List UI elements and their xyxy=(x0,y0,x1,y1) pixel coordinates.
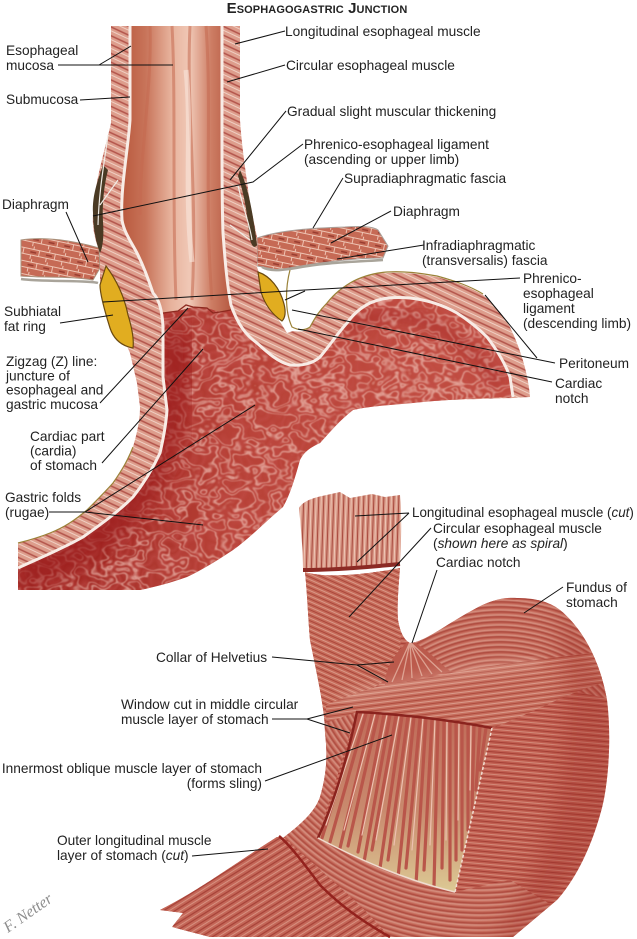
title: Esophagogastric Junction xyxy=(227,0,407,17)
diaphragm right xyxy=(257,226,388,270)
label: infradiaphragmatic fascia: Infradiaphragmatic xyxy=(422,238,535,253)
label: window cut: Window cut in middle circular xyxy=(121,697,298,712)
right body fibres xyxy=(150,560,620,939)
label: zigzag line: juncture of xyxy=(5,368,70,383)
label: window cut: muscle layer of stomach xyxy=(121,712,269,727)
mucosa base xyxy=(15,295,520,595)
window lower edge xyxy=(318,838,455,892)
lower arcs xyxy=(270,712,560,939)
stomach mucosa xyxy=(15,295,520,595)
label: circular esophageal muscle: Circular esophageal muscle xyxy=(286,58,455,73)
window top edge xyxy=(318,712,492,838)
window in circular layer xyxy=(318,712,492,892)
label: phrenico-esophageal ligament descending: ligament xyxy=(523,301,575,316)
collar highlight xyxy=(340,660,540,700)
esophagus pale streak xyxy=(186,70,192,262)
label: infradiaphragmatic fascia: (transversalis) fascia xyxy=(422,253,548,268)
label: phrenico-esophageal ligament upper: Phrenico-esophageal ligament xyxy=(304,137,489,152)
label: zigzag line: esophageal and xyxy=(6,383,103,398)
fundus arcs xyxy=(410,600,615,700)
label: zigzag line: Zigzag (Z) line: xyxy=(6,354,97,369)
wall silhouette xyxy=(18,26,530,590)
outer longitudinal cut edge xyxy=(279,836,390,937)
label: gastric folds: (rugae) xyxy=(5,505,49,520)
tube fibres xyxy=(305,568,401,722)
inner white line xyxy=(18,26,167,568)
window cut edge xyxy=(455,728,492,892)
label: outer longitudinal: layer of stomach ( xyxy=(57,848,166,863)
esophagus folds xyxy=(140,26,212,300)
label: forms sling: (forms sling) xyxy=(187,776,262,791)
label: esophageal mucosa: Esophageal xyxy=(6,43,78,58)
label: innermost oblique: Innermost oblique muscle layer of stomach xyxy=(2,761,262,776)
esophagus lumen xyxy=(122,26,231,313)
illustration: stomach muscle layers xyxy=(150,492,620,939)
label: supradiaphragmatic fascia: Supradiaphragmatic fascia xyxy=(344,171,506,186)
fan strokes xyxy=(392,642,442,682)
label: diaphragm right: Diaphragm xyxy=(393,204,460,219)
label: zigzag line: gastric mucosa xyxy=(6,397,98,412)
dark tissue left xyxy=(93,165,108,253)
label: circular muscle spiral: Circular esophageal muscle xyxy=(433,521,602,536)
dome dark rim xyxy=(350,315,500,385)
label: fundus: Fundus of xyxy=(566,580,627,595)
label: diaphragm left: Diaphragm xyxy=(2,197,69,212)
rugae pale texture xyxy=(15,295,520,595)
label: cardiac notch lower: Cardiac notch xyxy=(436,555,520,570)
tail fibres xyxy=(160,837,387,937)
label: submucosa: Submucosa xyxy=(6,92,79,107)
labels: top illustration xyxy=(2,24,631,520)
labels: lower illustration xyxy=(2,505,634,863)
contrast softening wash xyxy=(150,560,620,939)
inner oblique fan fibres xyxy=(322,714,486,886)
label: collar of Helvetius: Collar of Helvetius xyxy=(156,650,267,665)
label: cardiac part: of stomach xyxy=(30,458,97,473)
label: longitudinal esophageal muscle: Longitudinal esophageal muscle xyxy=(285,24,481,39)
label: gradual thickening: Gradual slight muscular thickening xyxy=(287,104,496,119)
label: phrenico-esophageal ligament descending: (descending limb) xyxy=(523,316,631,331)
mucosa dark band xyxy=(15,330,176,580)
illustration: esophagogastric section xyxy=(15,26,530,595)
diaphragm left xyxy=(21,239,100,280)
label: subhiatal fat ring: Subhiatal xyxy=(4,304,61,319)
label: gastric folds: Gastric folds xyxy=(5,490,81,505)
label: circular muscle spiral: ( xyxy=(433,536,438,551)
label: phrenico-esophageal ligament descending: esophageal xyxy=(523,286,594,301)
label: phrenico-esophageal ligament upper: (ascending or upper limb) xyxy=(304,152,459,167)
label: cardiac part: (cardia) xyxy=(30,444,76,458)
cut esophagus stub xyxy=(299,492,401,570)
right white line xyxy=(222,26,513,397)
label: esophageal mucosa: mucosa xyxy=(6,58,54,73)
fascia under diaphragm xyxy=(21,260,383,283)
leader lines xyxy=(49,31,563,856)
label: cardiac notch top: Cardiac xyxy=(555,376,602,391)
notch fan xyxy=(385,640,452,685)
label: longitudinal muscle cut: Longitudinal esophageal muscle (cut) xyxy=(412,505,634,520)
label: cardiac part: Cardiac part xyxy=(30,429,105,444)
label: subhiatal fat ring: fat ring xyxy=(4,319,46,334)
label: fundus: stomach xyxy=(566,595,618,610)
fat ring left xyxy=(100,266,133,348)
fat ring right xyxy=(258,272,285,321)
peritoneum line xyxy=(18,270,483,543)
longitudinal cut base band xyxy=(303,564,400,570)
right edge shading xyxy=(490,610,615,939)
label: outer longitudinal: cut) xyxy=(166,848,189,863)
collar band xyxy=(326,652,603,728)
dark tissue right xyxy=(238,170,257,247)
rugae dark texture xyxy=(18,308,483,590)
label: cardiac notch top: notch xyxy=(555,391,588,406)
artist signature: F. Netter xyxy=(0,890,57,937)
label: phrenico-esophageal ligament descending: Phrenico- xyxy=(523,271,582,286)
label: peritoneum: Peritoneum xyxy=(559,356,629,371)
stomach base fibres xyxy=(150,560,620,939)
label: outer longitudinal: Outer longitudinal muscle xyxy=(57,833,211,848)
zigzag line xyxy=(163,305,231,313)
label: circular muscle spiral: shown here as spiral) xyxy=(438,536,568,551)
fascia strands xyxy=(98,135,252,240)
